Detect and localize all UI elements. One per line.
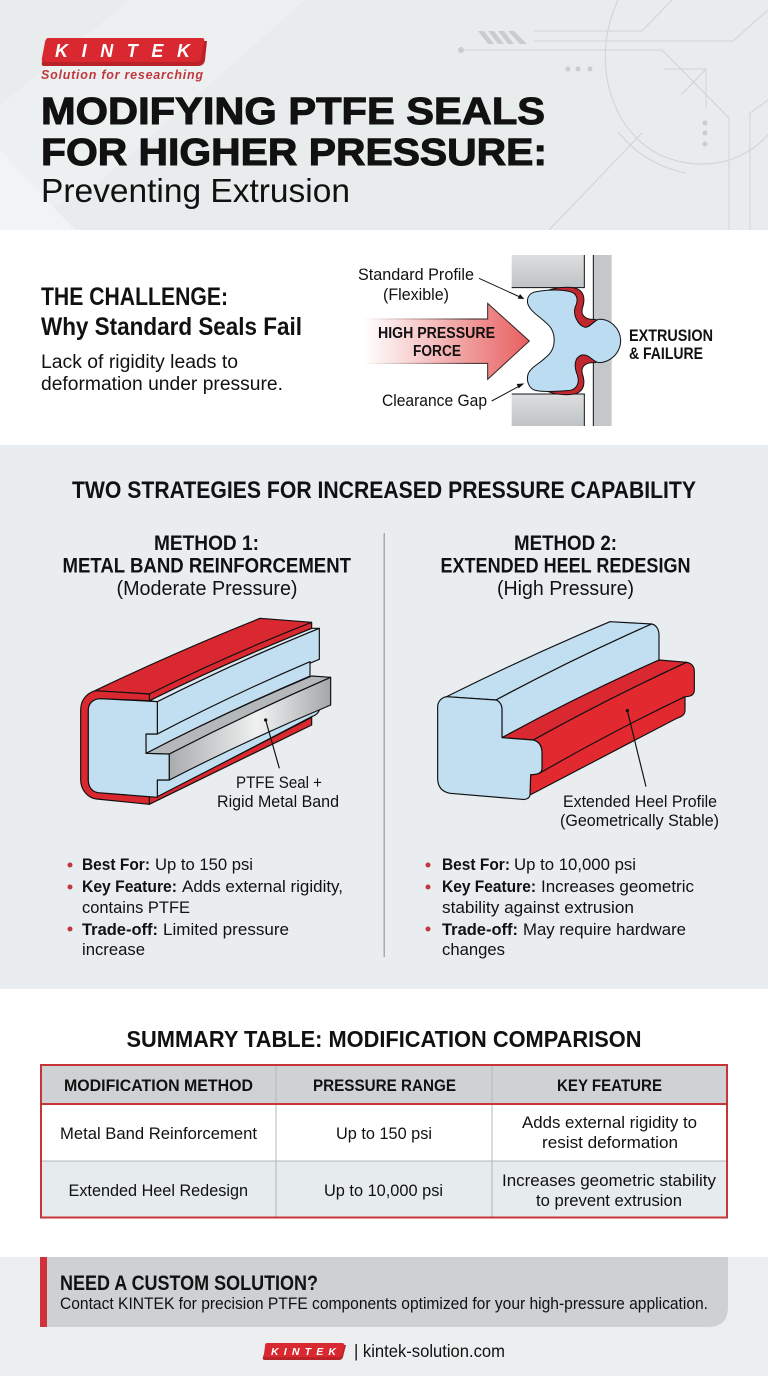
challenge text: THE CHALLENGE: bbox=[41, 283, 228, 311]
method 2 bullets bbox=[426, 855, 694, 959]
call to action banner bbox=[40, 1257, 728, 1327]
summary table: PRESSURE RANGE bbox=[313, 1076, 456, 1095]
challenge text bbox=[41, 283, 302, 395]
method 1 bullets: increase bbox=[82, 940, 145, 959]
summary table: Extended Heel Redesign bbox=[68, 1181, 248, 1200]
method 1 bullets: Up to 150 psi bbox=[155, 855, 253, 874]
callout arrows bbox=[479, 278, 521, 401]
call to action banner: Contact KINTEK for precision PTFE components optimized for your high-pressure application. bbox=[60, 1295, 708, 1313]
challenge text: deformation under pressure. bbox=[41, 374, 283, 395]
panel: the challenge bbox=[0, 230, 768, 445]
method 1 bullets: contains PTFE bbox=[82, 898, 190, 917]
KINTEK logo: Solution for researching bbox=[41, 68, 203, 82]
method 2 heading: (High Pressure) bbox=[497, 578, 634, 600]
panel: two strategies bbox=[0, 445, 768, 989]
method 2 bullets: May require hardware bbox=[523, 920, 686, 939]
summary table bbox=[41, 1065, 727, 1218]
illustration: metal band seal: Rigid Metal Band bbox=[217, 792, 339, 811]
summary table: resist deformation bbox=[542, 1133, 678, 1152]
method 1 bullets: Key Feature: bbox=[82, 877, 177, 896]
panel: summary bbox=[0, 989, 768, 1257]
divider between methods bbox=[384, 533, 385, 957]
footer logo and url bbox=[263, 1341, 505, 1361]
illustration: extended heel seal bbox=[438, 622, 719, 830]
summary table: MODIFICATION METHOD bbox=[64, 1076, 253, 1095]
diagram: seal extrusion bbox=[358, 255, 713, 426]
illustration: extended heel seal: Extended Heel Profile bbox=[563, 792, 717, 811]
diagram: seal extrusion: Clearance Gap bbox=[382, 392, 487, 410]
method 1 heading bbox=[62, 532, 351, 600]
method 2 heading: METHOD 2: bbox=[514, 532, 617, 555]
call to action banner: NEED A CUSTOM SOLUTION? bbox=[60, 1272, 318, 1295]
method 1 heading: METAL BAND REINFORCEMENT bbox=[62, 554, 351, 578]
method 2 heading bbox=[440, 532, 690, 600]
diagram: seal extrusion: & FAILURE bbox=[629, 345, 703, 363]
method 2 bullets: Increases geometric bbox=[541, 877, 694, 896]
title: Preventing Extrusion bbox=[41, 172, 350, 209]
summary table: Metal Band Reinforcement bbox=[60, 1124, 257, 1143]
red deformation bands bbox=[547, 287, 597, 395]
KINTEK logo: KINTEK bbox=[55, 41, 192, 61]
diagram: seal extrusion: EXTRUSION bbox=[629, 327, 713, 345]
method 1 heading: METHOD 1: bbox=[154, 532, 259, 555]
method 1 bullets: Best For: bbox=[82, 855, 150, 874]
diagram: seal extrusion: (Flexible) bbox=[383, 286, 449, 304]
diagram: seal extrusion: HIGH PRESSURE bbox=[378, 325, 495, 342]
title: FOR HIGHER PRESSURE: bbox=[41, 132, 547, 174]
illustration: extended heel seal: (Geometrically Stable) bbox=[560, 811, 719, 830]
footer logo and url: | kintek-solution.com bbox=[354, 1341, 505, 1361]
illustration: metal band seal bbox=[81, 618, 339, 811]
method 1 bullets bbox=[68, 855, 343, 959]
diagram: seal extrusion: Standard Profile bbox=[358, 266, 474, 284]
summary table: Up to 10,000 psi bbox=[324, 1181, 443, 1200]
title: MODIFYING PTFE SEALS bbox=[41, 91, 545, 133]
method 2 heading: EXTENDED HEEL REDESIGN bbox=[440, 554, 690, 578]
header panel bbox=[0, 0, 768, 230]
summary table: Up to 150 psi bbox=[336, 1124, 432, 1143]
method 2 bullets: changes bbox=[442, 940, 505, 959]
method 2 bullets: Key Feature: bbox=[442, 877, 536, 896]
challenge text: Why Standard Seals Fail bbox=[41, 313, 302, 341]
summary table: KEY FEATURE bbox=[557, 1076, 662, 1095]
summary table: Adds external rigidity to bbox=[522, 1113, 697, 1132]
method 2 bullets: Trade-off: bbox=[442, 920, 518, 939]
pressure arrow bbox=[363, 303, 529, 379]
summary table: Increases geometric stability bbox=[502, 1171, 716, 1190]
method 1 bullets: Adds external rigidity, bbox=[182, 877, 343, 896]
KINTEK logo bbox=[41, 38, 207, 82]
title bbox=[41, 91, 547, 209]
method 2 bullets: stability against extrusion bbox=[442, 898, 634, 917]
method 2 bullets: Up to 10,000 psi bbox=[514, 855, 636, 874]
method 2 bullets: Best For: bbox=[442, 855, 510, 874]
summary table: to prevent extrusion bbox=[536, 1191, 682, 1210]
illustration: metal band seal: PTFE Seal + bbox=[236, 773, 322, 792]
summary heading: SUMMARY TABLE: MODIFICATION COMPARISON bbox=[126, 1026, 642, 1052]
footer logo and url: KINTEK bbox=[271, 1346, 337, 1358]
method 1 heading: (Moderate Pressure) bbox=[116, 578, 298, 600]
method 1 bullets: Limited pressure bbox=[163, 920, 289, 939]
challenge text: Lack of rigidity leads to bbox=[41, 352, 238, 373]
housing blocks bbox=[512, 255, 612, 426]
blue seal body bbox=[527, 290, 621, 391]
method 1 bullets: Trade-off: bbox=[82, 920, 158, 939]
diagram: seal extrusion: FORCE bbox=[413, 343, 461, 360]
